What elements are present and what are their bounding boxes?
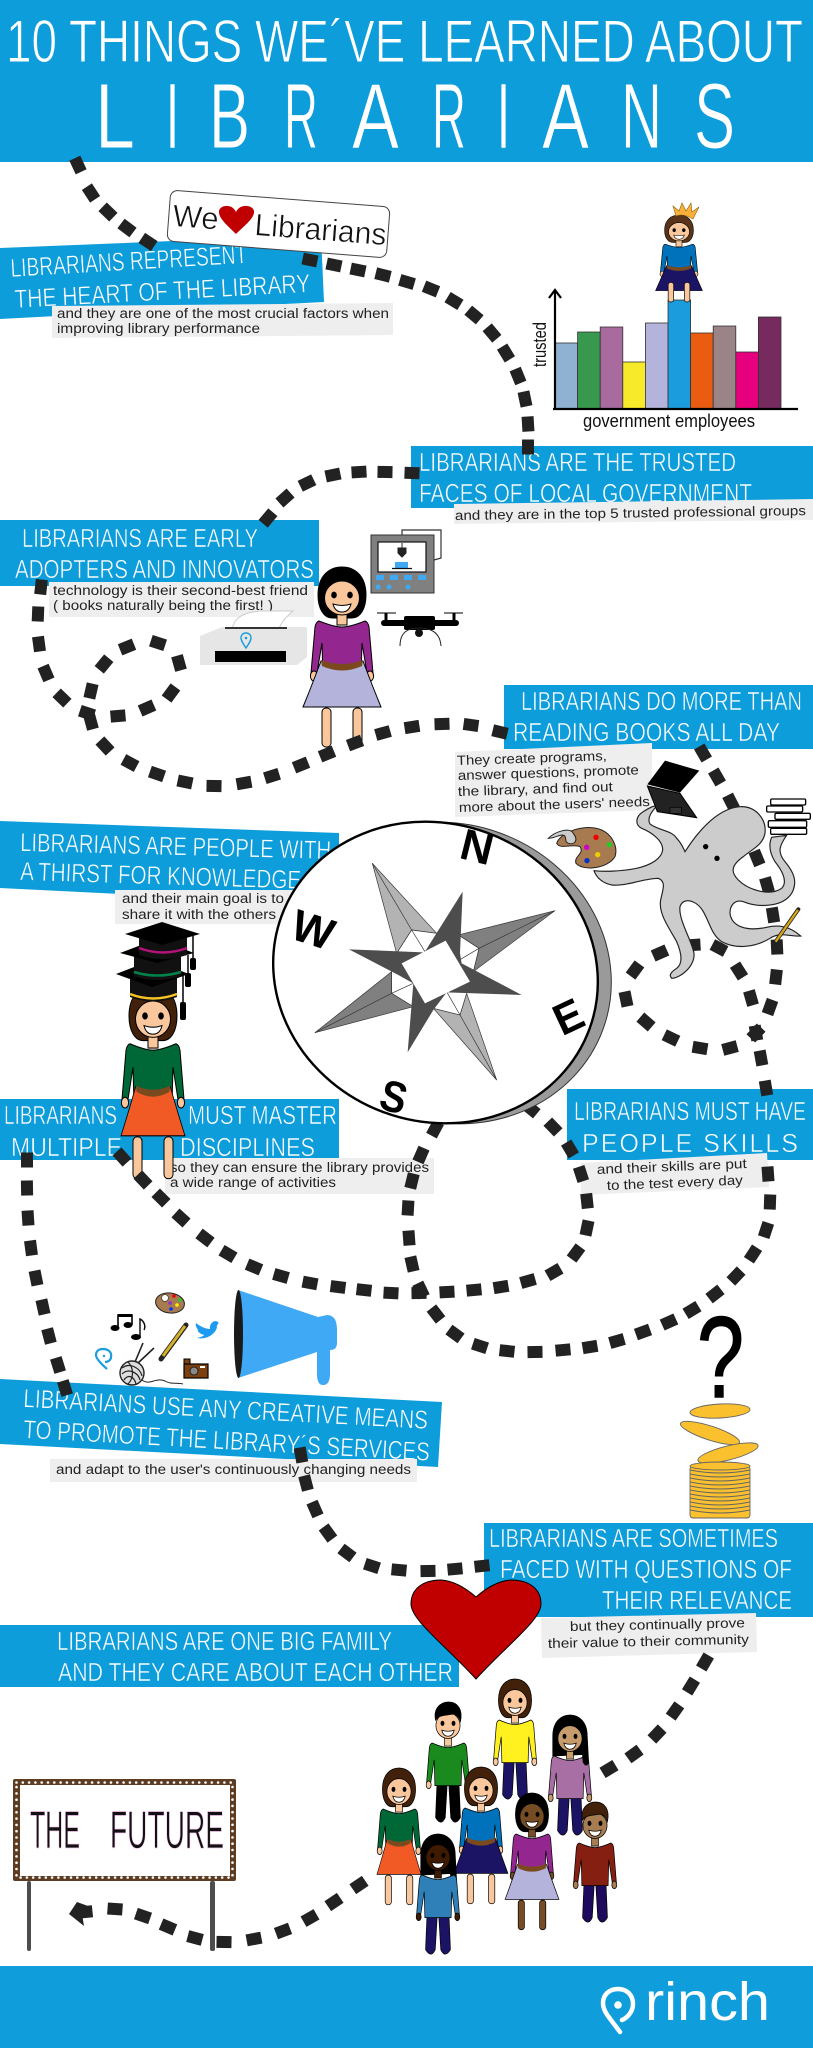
panel: thirst for knowledge: LIBRARIANS ARE PEOPLE WITH: [20, 827, 332, 865]
icon: big red heart: [411, 1580, 541, 1679]
title line 2: I: [497, 64, 510, 168]
icon: laptop: [647, 761, 699, 818]
icon: pencil: [775, 909, 798, 943]
icon: pencil: [161, 1325, 186, 1359]
dashed path: trusted faces to early adopters: [268, 472, 412, 518]
panel: more than reading: [455, 685, 813, 817]
icon: stacked graduation caps: [116, 922, 200, 1020]
princh logo: rinch: [645, 1972, 770, 2032]
panel: people skills: [567, 1089, 813, 1195]
icon: 3d printer: [371, 530, 441, 593]
icon: location pin: [96, 1349, 111, 1369]
dashed path: heart to trusted faces: [310, 260, 528, 447]
icon: palette: [548, 828, 616, 868]
icon: yarn ball with needles: [120, 1343, 183, 1385]
we love librarians sign: Librarians: [253, 207, 388, 252]
panel: creative means: [0, 1379, 442, 1482]
compass letter N: N: [455, 820, 498, 875]
panel: early adopters: technology is their second-best friend: [53, 583, 308, 598]
icon: stack of books: [767, 799, 810, 834]
panel: questions of relevance: but they continually prove: [570, 1615, 745, 1634]
title line 2: I: [166, 64, 179, 168]
panel: early adopters: [0, 520, 319, 617]
octopus body: [594, 806, 801, 978]
person: man in red: [573, 1802, 617, 1922]
dashed path: relevance to family: [609, 1662, 705, 1769]
octopus with laptop, palette, books and pencil: [548, 761, 810, 978]
panel: trusted faces: LIBRARIANS ARE THE TRUSTED: [419, 447, 736, 477]
panel: people skills: PEOPLE SKILLS: [582, 1128, 800, 1158]
compass: [230, 776, 654, 1169]
panel: must master multiple disciplines: MUST MASTER: [188, 1100, 337, 1130]
icon: camera: [184, 1359, 208, 1378]
title line 2: R: [284, 64, 318, 168]
panel: people skills: and their skills are put: [597, 1156, 747, 1177]
dashed path: people skills to compass: [408, 1129, 770, 1352]
icon: music notes: [110, 1314, 145, 1340]
footer banner: [0, 1966, 813, 2048]
icon: question mark: ?: [697, 1294, 744, 1422]
dashed path: early adopters loop: [38, 587, 500, 786]
panel: early adopters: ADOPTERS AND INNOVATORS: [15, 554, 314, 584]
dashed path: creative means to relevance: [301, 1455, 482, 1571]
title line 2: L: [95, 64, 135, 168]
panel: creative means: TO PROMOTE THE LIBRARY´S SERVICES: [23, 1414, 431, 1467]
panel: trusted faces: and they are in the top 5 trusted professional groups: [455, 503, 806, 523]
the future billboard: THE: [30, 1801, 80, 1860]
billboard text: FUTURE: [110, 1801, 224, 1860]
dashed path: disciplines to creative means: [27, 1160, 65, 1388]
panel: big family: LIBRARIANS ARE ONE BIG FAMILY: [57, 1626, 392, 1656]
panel: people skills: to the test every day: [607, 1173, 743, 1193]
panel: must master multiple disciplines: MULTIPLE: [11, 1132, 122, 1162]
panel: thirst for knowledge: A THIRST FOR KNOWLEDGE: [20, 856, 302, 895]
compass letter W: W: [285, 901, 341, 960]
person: graduate librarian with stacked hats: [116, 922, 200, 1179]
icon: small palette: [154, 1291, 186, 1315]
panel: librarians represent the heart: LIBRARIANS REPRESENT: [10, 239, 248, 283]
person: man in green: [426, 1702, 470, 1822]
panel: must master multiple disciplines: so they can ensure the library provides: [170, 1160, 429, 1175]
we love librarians sign: [167, 190, 390, 258]
compass star: [315, 863, 555, 1080]
person: woman in yellow: [493, 1679, 537, 1799]
panel: thirst for knowledge: [0, 821, 339, 924]
title line 2: A: [352, 64, 399, 168]
dashed path: compass to disciplines: [122, 1109, 587, 1293]
panel: thirst for knowledge: and their main goal is to: [122, 891, 284, 906]
axis label: government employees: [583, 411, 755, 431]
title line 2: [95, 64, 735, 168]
arrow: dashed path to the future: [69, 1885, 359, 1942]
panel: big family: AND THEY CARE ABOUT EACH OTHER: [58, 1657, 453, 1687]
icon: drone: [377, 613, 463, 646]
title line 2: B: [209, 64, 250, 168]
panel: trusted faces: [411, 446, 813, 524]
icon: megaphone: [234, 1290, 337, 1385]
family group: [377, 1679, 617, 1954]
panel: librarians represent the heart: and they are one of the most crucial factors when: [57, 306, 389, 321]
panel: questions of relevance: [484, 1523, 813, 1658]
icon: red heart: [219, 206, 254, 234]
panel: questions of relevance: their value to their community: [548, 1632, 749, 1651]
compass letter E: E: [546, 989, 592, 1045]
panel: more than reading: answer questions, promote: [458, 762, 639, 783]
panel: more than reading: They create programs,: [457, 748, 607, 768]
person: woman in navy skirt: [454, 1767, 508, 1904]
panel: creative means: and adapt to the user's continuously changing needs: [56, 1462, 411, 1477]
person: woman in orange skirt: [377, 1768, 421, 1905]
title line 2: R: [432, 64, 466, 168]
title line 2: A: [542, 64, 589, 168]
title line 2: S: [694, 64, 735, 168]
panel: must master multiple disciplines: LIBRARIANS: [4, 1100, 117, 1130]
icon: printer: [200, 611, 307, 665]
person: woman in blue at front: [416, 1834, 460, 1954]
panel: must master multiple disciplines: DISCIPLINES: [180, 1132, 315, 1162]
panel: librarians represent the heart: [0, 235, 393, 338]
we love librarians sign: We: [171, 198, 220, 237]
icon: coins: [678, 1402, 760, 1518]
panel: thirst for knowledge: share it with the others: [122, 907, 276, 922]
title line 2: N: [621, 64, 662, 168]
icon: crown: [673, 203, 699, 219]
panel: must master multiple disciplines: a wide range of activities: [170, 1175, 336, 1190]
panel: more than reading: more about the users' needs: [459, 794, 650, 815]
dashed path: top start to the heart: [78, 165, 148, 242]
panel: librarians represent the heart: improving library performance: [57, 321, 260, 336]
icon: twitter bird: [196, 1321, 219, 1338]
person: woman in lilac skirt: [505, 1793, 559, 1930]
bar chart: trusted government employees: [530, 290, 798, 431]
person: woman with long hair: [548, 1715, 592, 1835]
panel: creative means: LIBRARIANS USE ANY CREATIVE MEANS: [23, 1383, 429, 1435]
person: crowned librarian on the tallest bar: [656, 203, 702, 302]
panel: early adopters: ( books naturally being the first! ): [53, 598, 273, 613]
panel: more than reading: the library, and find out: [458, 779, 613, 799]
person: early adopter librarian: [303, 567, 381, 747]
panel: early adopters: LIBRARIANS ARE EARLY: [22, 523, 258, 553]
compass letter S: S: [375, 1070, 413, 1124]
the future billboard: [13, 1779, 236, 1951]
header banner: [0, 0, 813, 168]
dashed path: octopus loop: [626, 753, 777, 1088]
panel: must master multiple disciplines: [0, 1099, 434, 1194]
panel: librarians represent the heart: THE HEART OF THE LIBRARY: [14, 268, 311, 314]
panel: big family: [0, 1625, 459, 1687]
axis label: trusted: [530, 322, 550, 367]
